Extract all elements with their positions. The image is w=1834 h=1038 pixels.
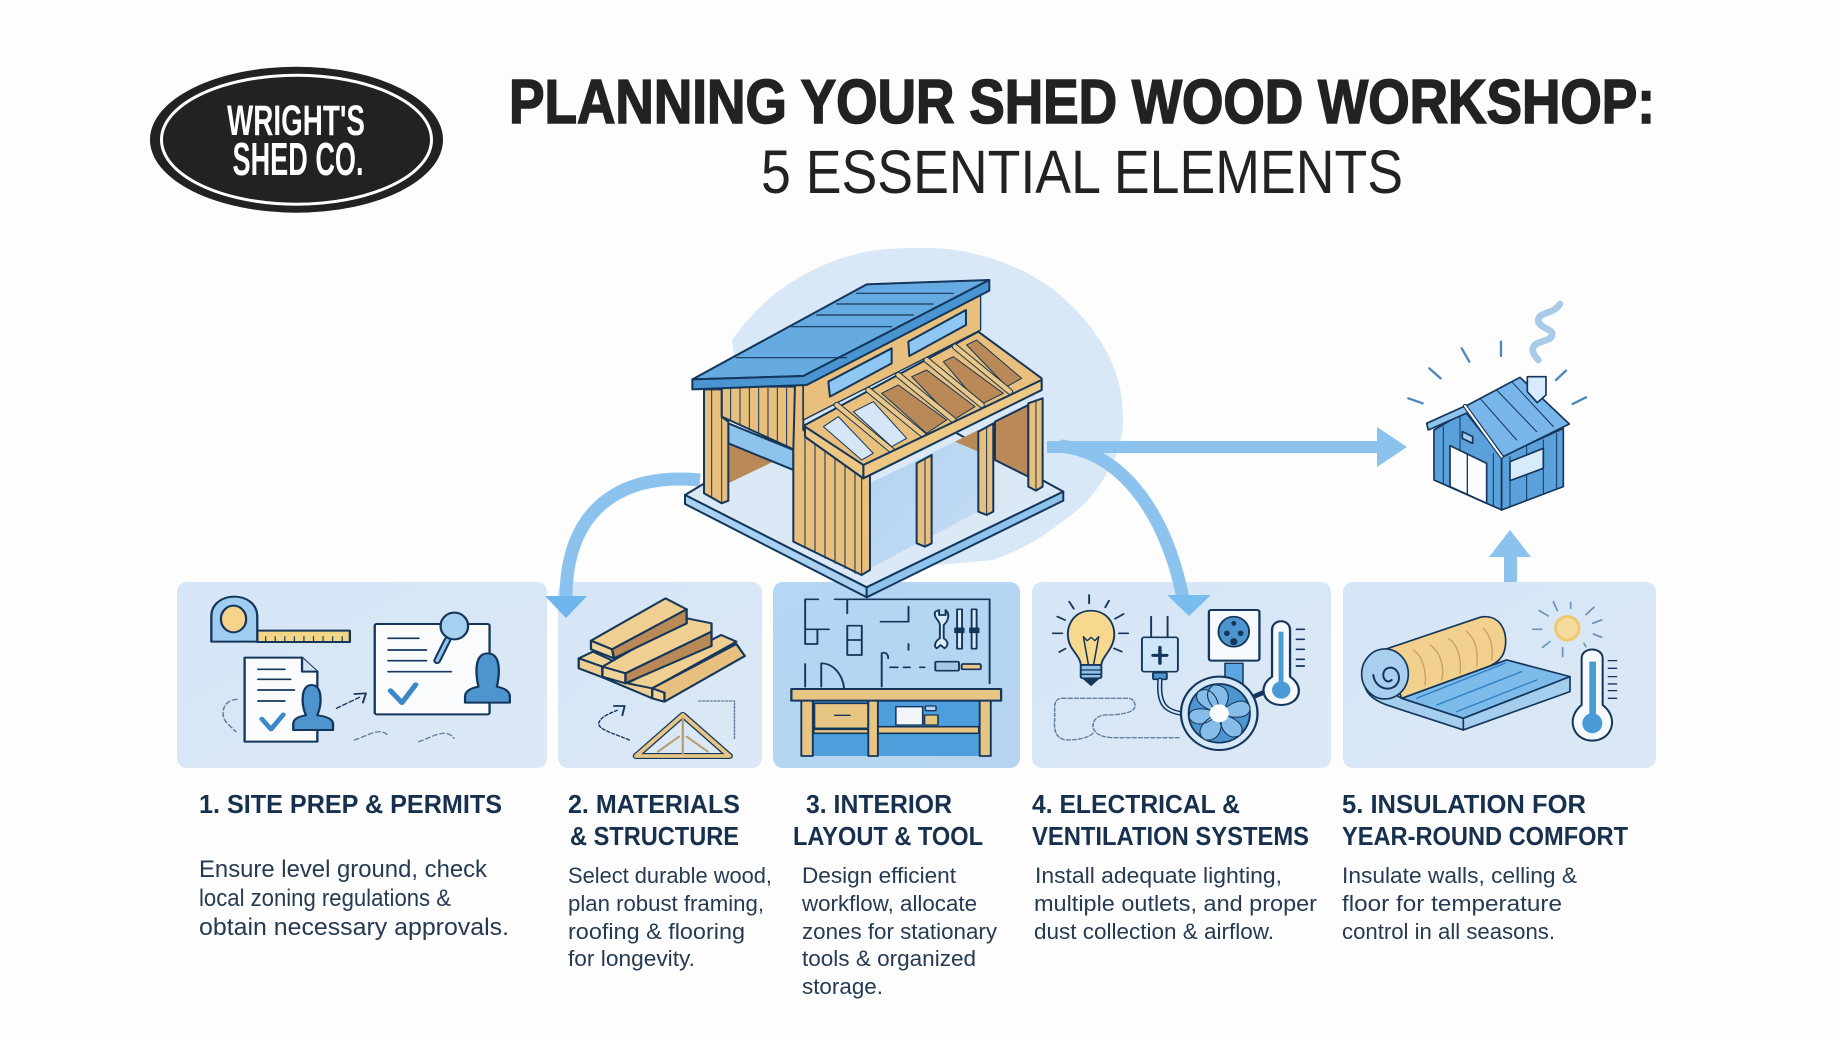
text block 2: for longevity. xyxy=(568,946,695,971)
text block 3: tools & organized xyxy=(802,946,976,971)
arrow: shed to finished house xyxy=(1047,427,1407,467)
text block 2 xyxy=(568,863,772,971)
icon: wall socket xyxy=(1209,610,1259,687)
text block 3: storage. xyxy=(802,974,883,999)
central illustration: isometric shed xyxy=(685,280,1063,597)
text block 3: Design efficient xyxy=(802,863,957,888)
decorative dashed paths xyxy=(223,699,454,742)
icon: blueprint layout lines xyxy=(805,599,990,688)
house door xyxy=(1450,446,1487,503)
background blob behind shed xyxy=(732,248,1123,570)
text block 4: dust collection & airflow. xyxy=(1034,919,1274,944)
icon: dashed arrow xyxy=(599,706,629,740)
heading 1: 1. SITE PREP & PERMITS xyxy=(199,789,502,819)
shed clerestory wall and windows xyxy=(803,295,981,420)
icon: ventilation fan xyxy=(1181,677,1258,750)
arrow: insulation up to house xyxy=(1489,530,1531,582)
shed back walls xyxy=(728,405,1028,568)
icon: finished insulated shed house xyxy=(1408,304,1586,510)
text block 4 xyxy=(1034,863,1318,944)
shed open rafters xyxy=(805,332,1042,478)
icon: approved document with magnifier xyxy=(375,613,510,714)
text block 5: floor for temperature xyxy=(1342,891,1562,916)
panel: interior layout and tool xyxy=(773,582,1020,768)
icon: plug xyxy=(1142,617,1184,714)
text block 2: plan robust framing, xyxy=(568,891,764,916)
icon: thermometer xyxy=(1254,621,1304,705)
icon: roof truss xyxy=(636,715,730,756)
text block 4: Install adequate lighting, xyxy=(1035,863,1282,888)
arrow: shed to electrical xyxy=(1060,446,1211,616)
dashed circuit path xyxy=(1054,698,1181,740)
text block 1: local zoning regulations & xyxy=(199,885,451,912)
text block 1 xyxy=(199,856,509,941)
shed slab xyxy=(685,417,1063,597)
text block 5 xyxy=(1342,863,1577,944)
title xyxy=(509,68,1655,206)
panel: materials and structure xyxy=(558,582,762,768)
icon: dashed arrow between documents xyxy=(336,693,366,708)
icon: insulation roll xyxy=(1362,617,1570,730)
title: PLANNING YOUR SHED WOOD WORKSHOP: xyxy=(509,68,1655,137)
heading 4: VENTILATION SYSTEMS xyxy=(1032,821,1309,851)
house walls xyxy=(1434,412,1502,510)
logo: Wright's Shed Co.: SHED CO. xyxy=(232,133,364,185)
icon: light bulb xyxy=(1053,595,1128,685)
text block 5: Insulate walls, celling & xyxy=(1342,863,1577,888)
heading 5 xyxy=(1342,789,1628,851)
heading 2: & STRUCTURE xyxy=(570,821,739,851)
panel: site prep and permits xyxy=(177,582,547,768)
text block 5: control in all seasons. xyxy=(1342,919,1555,944)
heading 4 xyxy=(1032,789,1309,851)
shed posts xyxy=(917,398,1043,547)
icon: lumber stack xyxy=(579,598,745,702)
icon: wall tools xyxy=(935,609,981,671)
icon: thermometer xyxy=(1573,650,1617,741)
panel: electrical and ventilation xyxy=(1032,582,1331,768)
house chimney xyxy=(1527,377,1546,403)
text block 3: zones for stationary xyxy=(802,919,998,944)
heading 3: LAYOUT & TOOL xyxy=(793,821,983,851)
icon: tape measure xyxy=(211,597,350,642)
text block 2: Select durable wood, xyxy=(568,863,772,888)
text block 1: obtain necessary approvals. xyxy=(199,914,509,941)
logo: Wright's Shed Co.: WRIGHT'S xyxy=(227,97,365,145)
house rays xyxy=(1408,342,1586,404)
text block 3: workflow, allocate xyxy=(801,891,977,916)
text block 4: multiple outlets, and proper xyxy=(1034,891,1318,916)
house window xyxy=(1510,448,1543,481)
text block 1: Ensure level ground, check xyxy=(199,856,488,883)
heading 2: 2. MATERIALS xyxy=(568,789,740,819)
shed roof xyxy=(692,280,989,389)
text block 3 xyxy=(801,863,998,999)
shed front corner wall xyxy=(793,385,870,575)
heading 5: 5. INSULATION FOR xyxy=(1342,789,1586,819)
heading 3: 3. INTERIOR xyxy=(806,789,952,819)
logo: Wright's Shed Co. xyxy=(150,67,443,213)
icon: sun xyxy=(1533,602,1602,657)
shed left siding wall xyxy=(704,387,795,503)
panel: insulation xyxy=(1343,582,1656,768)
title: 5 ESSENTIAL ELEMENTS xyxy=(761,138,1403,206)
heading 5: YEAR-ROUND COMFORT xyxy=(1342,821,1628,851)
icon: permit document xyxy=(245,658,333,742)
heading 2 xyxy=(568,789,740,851)
house roof xyxy=(1466,377,1569,457)
arrow: shed to site prep and materials xyxy=(545,479,700,618)
house smoke xyxy=(1533,304,1560,360)
text block 2: roofing & flooring xyxy=(568,919,745,944)
icon: workbench xyxy=(791,689,1001,756)
heading 4: 4. ELECTRICAL & xyxy=(1032,789,1240,819)
heading 3 xyxy=(793,789,983,851)
